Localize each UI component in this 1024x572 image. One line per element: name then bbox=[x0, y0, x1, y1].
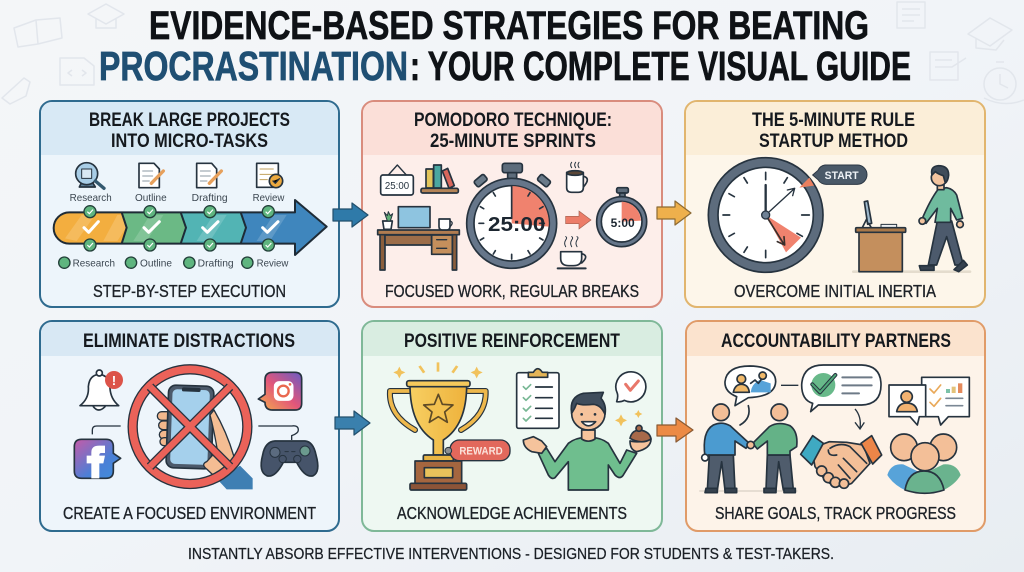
caption: step-by-step execution: STEP-BY-STEP EXECUTION bbox=[93, 281, 286, 301]
icon: progress speech bubble bbox=[725, 366, 776, 406]
caption: focused work: FOCUSED WORK, REGULAR BREAKS bbox=[385, 281, 639, 301]
heading: five minute rule bbox=[752, 109, 915, 152]
icon: notification bell bbox=[80, 370, 123, 410]
icon: wall clock bbox=[708, 158, 823, 272]
heading: pomodoro bbox=[414, 109, 612, 152]
step labels bottom: Drafting bbox=[198, 258, 234, 269]
icon: two partners shaking hands bbox=[700, 404, 797, 493]
icon: research magnifier bbox=[76, 163, 104, 188]
sparkles bbox=[393, 362, 642, 426]
panel: break large projects bbox=[40, 101, 339, 307]
step labels top: Research bbox=[70, 193, 112, 204]
icon: tea cup bbox=[558, 237, 586, 268]
icon: facebook bbox=[74, 439, 121, 478]
step labels top bbox=[70, 193, 285, 204]
caption: focused environment: CREATE A FOCUSED ENVIRONMENT bbox=[63, 503, 316, 523]
panel: five minute rule bbox=[685, 101, 985, 307]
icon: drafting document bbox=[197, 163, 221, 188]
icon: coffee cup bbox=[567, 162, 587, 192]
heading: break large projects bbox=[89, 109, 290, 152]
panel: positive reinforcement bbox=[362, 321, 662, 531]
icon: wall timer: 25:00 bbox=[385, 181, 409, 192]
tag: reward bbox=[445, 440, 510, 461]
icon: instagram bbox=[258, 372, 302, 410]
callout: start bbox=[813, 165, 867, 184]
icon: checklist bbox=[517, 369, 559, 428]
step labels top: Outline bbox=[135, 193, 167, 204]
heading: pomodoro: POMODORO TECHNIQUE: bbox=[414, 109, 612, 131]
icon: desk with laptop bbox=[378, 207, 459, 270]
icon: team bbox=[887, 434, 961, 493]
arrow: panel 4 to panel 5 bbox=[335, 411, 370, 435]
icon: goals speech bubble bbox=[802, 365, 881, 412]
icon: trophy bbox=[390, 381, 486, 490]
icon: 5-minute stopwatch: 5:00 bbox=[611, 216, 635, 230]
caption: acknowledge achievements: ACKNOWLEDGE ACHIEVEMENTS bbox=[397, 503, 627, 523]
icon: check speech bubble bbox=[616, 372, 646, 402]
heading: eliminate distractions: ELIMINATE DISTRACTIONS bbox=[83, 330, 295, 352]
icon: happy person bbox=[523, 392, 651, 490]
heading: pomodoro: 25-MINUTE SPRINTS bbox=[430, 130, 596, 152]
step labels bottom: Review bbox=[257, 258, 289, 269]
icon: notification bell: ! bbox=[112, 373, 116, 388]
heading: positive reinforcement: POSITIVE REINFORCEMENT bbox=[404, 330, 620, 352]
arrow: panel 1 to panel 2 bbox=[333, 203, 368, 227]
callout: start: START bbox=[825, 170, 859, 182]
icon: bookshelf bbox=[421, 165, 458, 193]
heading: five minute rule: THE 5-MINUTE RULE bbox=[752, 109, 915, 131]
step labels bottom: Outline bbox=[140, 258, 172, 269]
panel: eliminate distractions bbox=[40, 321, 339, 531]
icon: walking person bbox=[919, 166, 967, 272]
icon: 25-minute stopwatch: 25:00 bbox=[488, 213, 545, 236]
connector line bbox=[781, 383, 798, 387]
five minute illustration bbox=[708, 158, 970, 272]
arrow: timeline bbox=[54, 200, 327, 255]
heading: accountability partners: ACCOUNTABILITY PARTNERS bbox=[721, 330, 951, 352]
arrow: panel 5 to panel 6 bbox=[657, 418, 693, 442]
icon: handshake bbox=[801, 436, 882, 488]
caption: share goals: SHARE GOALS, TRACK PROGRESS bbox=[715, 503, 956, 523]
step labels top: Review bbox=[253, 193, 285, 204]
arrow: work to break bbox=[566, 211, 591, 229]
icon: 5-minute stopwatch bbox=[597, 188, 647, 247]
title bbox=[99, 4, 911, 89]
status dots bbox=[84, 206, 274, 251]
icon: desk bbox=[853, 201, 970, 272]
reinforcement illustration bbox=[390, 362, 651, 490]
distractions illustration bbox=[74, 369, 318, 489]
step labels bottom: Research bbox=[73, 258, 115, 269]
heading: five minute rule: STARTUP METHOD bbox=[759, 130, 908, 152]
check marks bbox=[84, 222, 278, 232]
icon: chat cards bbox=[889, 377, 969, 425]
step labels bottom bbox=[59, 257, 289, 269]
title: PROCRASTINATION bbox=[99, 43, 408, 89]
arrow: panel 2 to panel 3 bbox=[657, 201, 691, 225]
process arrow with steps bbox=[54, 163, 327, 269]
step labels top: Drafting bbox=[192, 193, 228, 204]
pomodoro illustration bbox=[378, 162, 647, 270]
connector lines bbox=[92, 426, 298, 440]
heading: break large projects: BREAK LARGE PROJECTS bbox=[89, 109, 290, 131]
icon: review document bbox=[257, 163, 283, 188]
icon: blocked phone bbox=[133, 369, 253, 489]
arrow: to handshake bbox=[855, 409, 864, 429]
tag: reward: REWARD bbox=[459, 445, 503, 457]
icon: game controller bbox=[261, 441, 318, 476]
heading: break large projects: INTO MICRO-TASKS bbox=[111, 130, 268, 152]
accountability illustration bbox=[700, 365, 969, 493]
caption: overcome inertia: OVERCOME INITIAL INERTIA bbox=[734, 281, 936, 301]
footer tagline: INSTANTLY ABSORB EFFECTIVE INTERVENTIONS - DESIGNED FOR STUDENTS & TEST-TAKERS. bbox=[188, 546, 834, 563]
icon: wall timer bbox=[381, 165, 413, 195]
panel: pomodoro technique bbox=[362, 101, 662, 307]
panel: accountability partners bbox=[686, 321, 985, 531]
icon: 25-minute stopwatch bbox=[467, 163, 557, 268]
icon: outline document bbox=[139, 163, 163, 188]
